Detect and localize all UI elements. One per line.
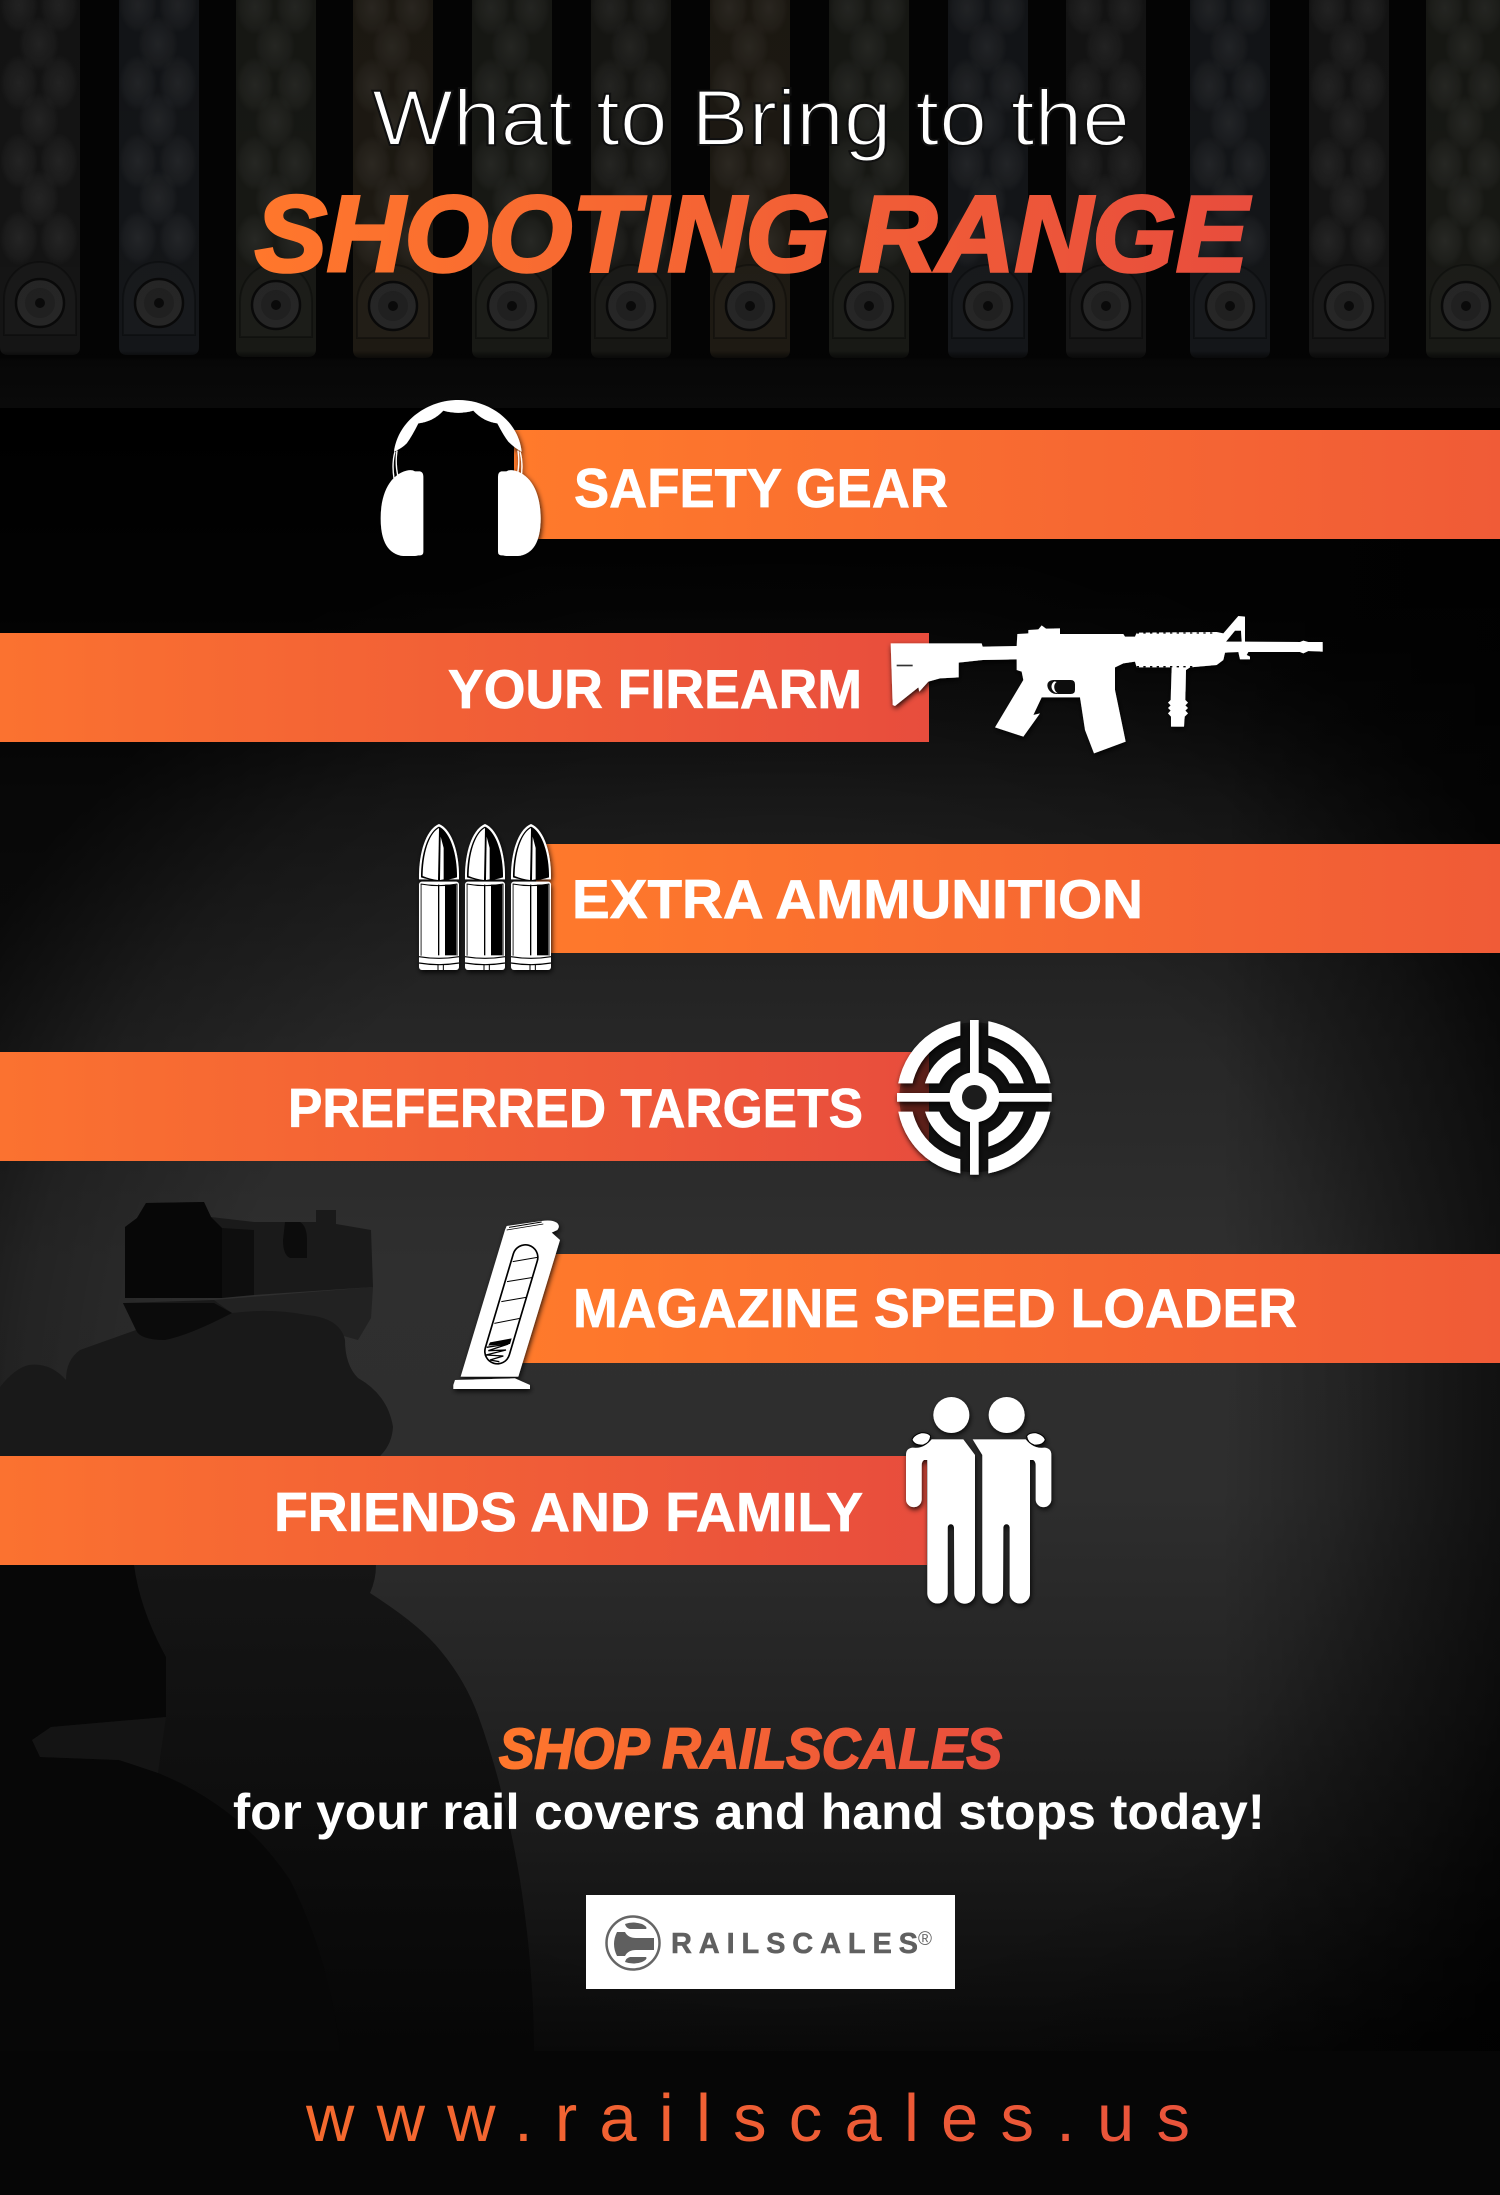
banner: extra ammunition <box>536 844 1500 953</box>
banner: safety gear <box>514 430 1500 539</box>
item: extra ammunition <box>419 824 1500 970</box>
logo wordmark: RAILSCALES <box>671 1928 918 1960</box>
label: friends and family: FRIENDS AND FAMILY <box>274 1481 863 1543</box>
heading: shop railscales: SHOP RAILSCALES <box>499 1717 1002 1781</box>
photo: pistol rear <box>125 1202 222 1298</box>
logo: railscales <box>586 1895 955 1989</box>
label: your firearm: YOUR FIREARM <box>448 658 862 720</box>
photo: forearm <box>0 1565 534 2051</box>
item: safety gear <box>381 400 1500 556</box>
icon: rifle silhouette <box>891 616 1323 753</box>
icon: three bullets <box>419 824 551 970</box>
background photo: hand holding pistol <box>0 1202 534 2051</box>
photo: slide serrations <box>222 1228 254 1298</box>
item: magazine speed loader <box>453 1220 1500 1389</box>
photo: ejection port <box>283 1222 307 1258</box>
banner: friends and family <box>0 1456 927 1565</box>
photo: pistol frame <box>214 1287 373 1340</box>
banner: your firearm <box>0 633 929 742</box>
label: safety gear: SAFETY GEAR <box>574 457 948 519</box>
photo: thumb shadow <box>123 1303 232 1340</box>
banner: preferred targets <box>0 1052 929 1161</box>
icon: two people side by side <box>906 1397 1051 1604</box>
header: rail covers background <box>0 0 1500 408</box>
item: your firearm <box>0 616 1323 753</box>
website url: www.railscales.us <box>305 2081 1190 2156</box>
label: preferred targets: PREFERRED TARGETS <box>288 1077 863 1139</box>
icon: ear protection headphones <box>381 400 541 556</box>
banner: magazine speed loader <box>520 1254 1500 1363</box>
photo: left shadow <box>0 1565 340 2051</box>
text: rail covers line: for your rail covers and hand stops today! <box>233 1784 1265 1840</box>
photo: sleeve highlight <box>32 1717 166 1773</box>
label: extra ammunition: EXTRA AMMUNITION <box>572 868 1143 930</box>
logo registered mark: ® <box>918 1929 932 1950</box>
title <box>255 73 1251 294</box>
label: magazine speed loader: MAGAZINE SPEED LOADER <box>573 1277 1297 1339</box>
title line 2: SHOOTING RANGE <box>255 173 1251 294</box>
footer <box>0 2051 1500 2195</box>
photo: pistol slide <box>125 1202 373 1298</box>
photo: gripping hand <box>0 1300 393 1457</box>
icon: crosshair target <box>897 1020 1052 1175</box>
call to action <box>233 1717 1265 1840</box>
icon: pistol magazine <box>453 1220 560 1389</box>
item: preferred targets <box>0 1020 1052 1175</box>
logo mark <box>606 1916 660 1970</box>
item: friends and family <box>0 1397 1051 1604</box>
title line 1: What to Bring to the <box>372 73 1130 162</box>
